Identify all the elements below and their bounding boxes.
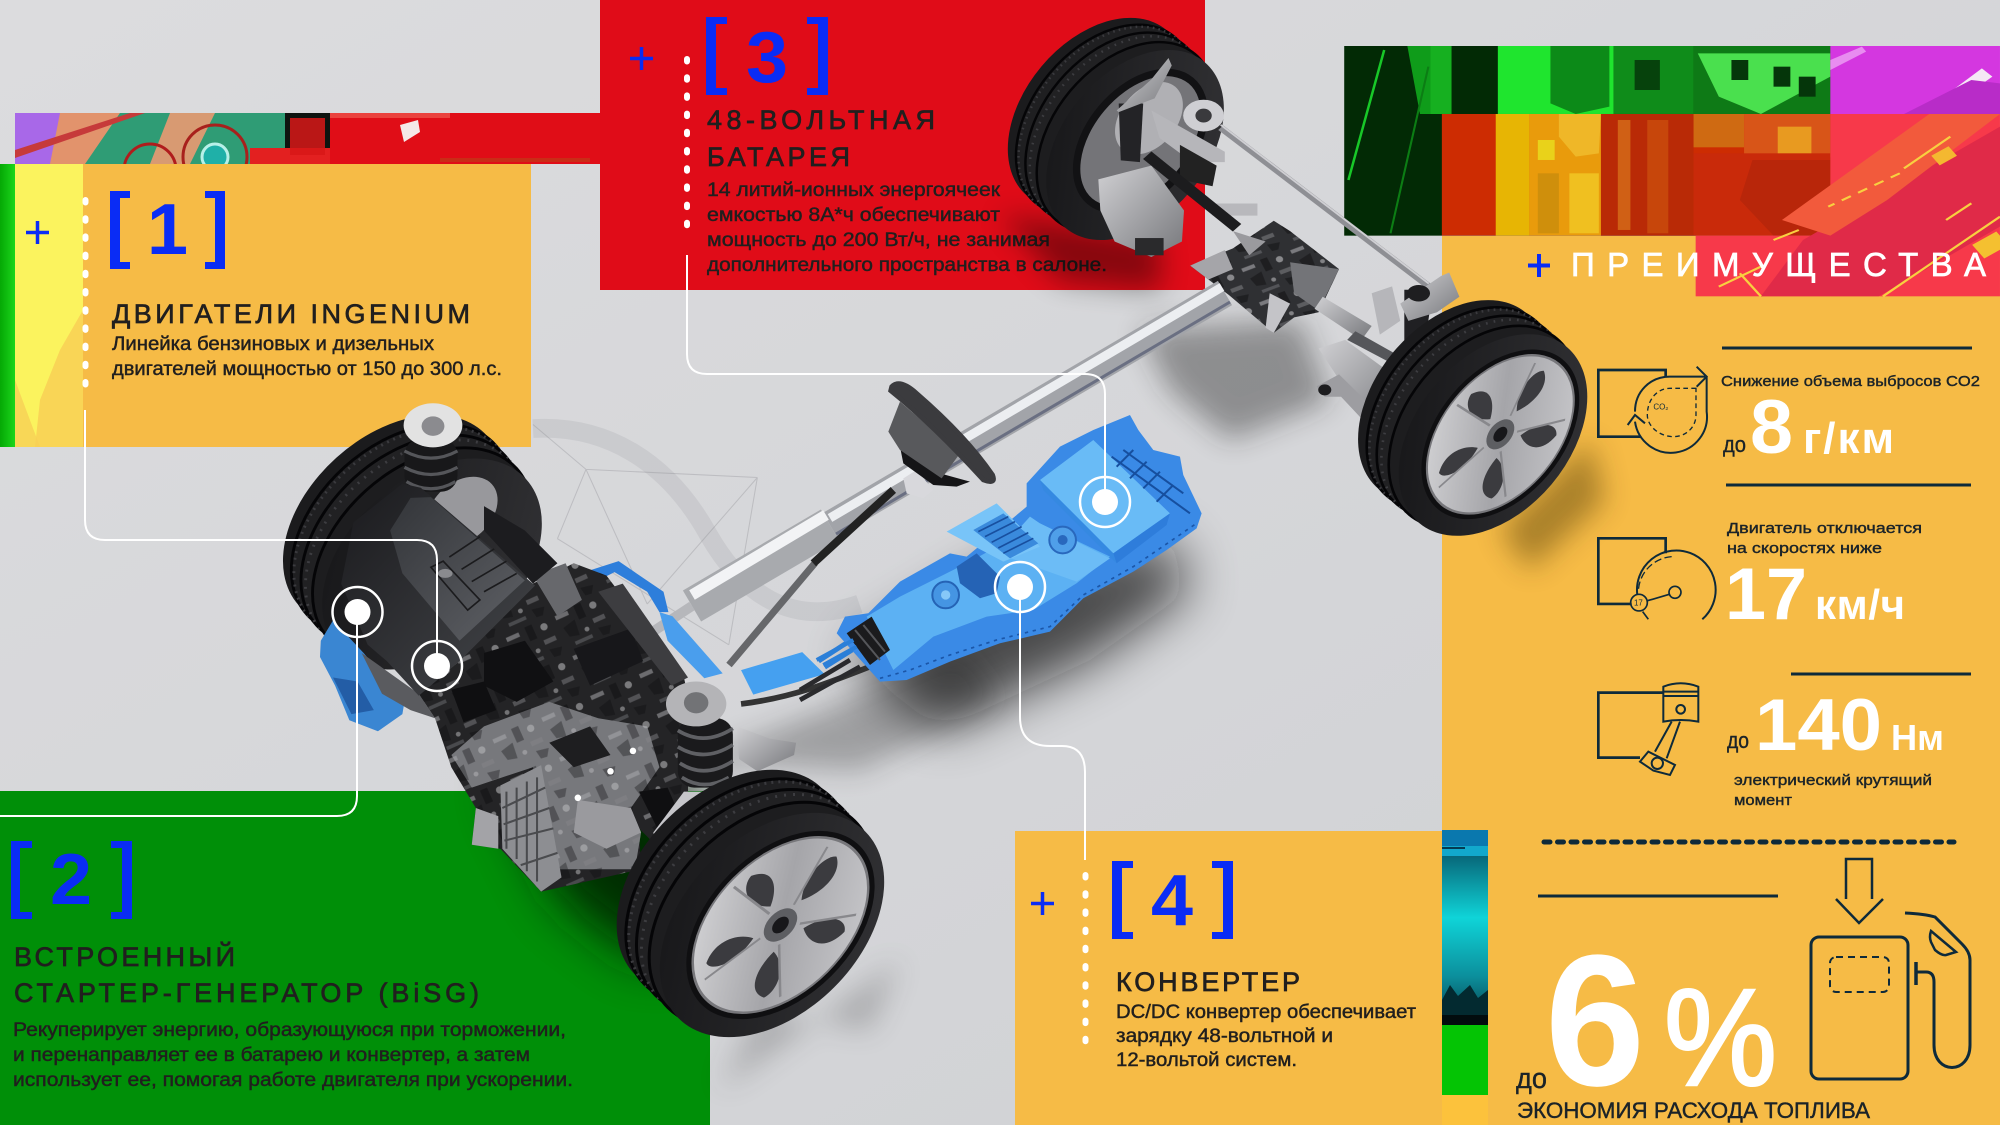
- transmission: [451, 702, 659, 869]
- stat: electric torque: до: [1727, 728, 1749, 753]
- text 3: дополнительного пространства в салоне.: [707, 255, 1107, 276]
- chassis: battery and converter: [800, 415, 1202, 700]
- chassis: steering wheel: [813, 384, 994, 563]
- icon: fuel pump with arrow: [1811, 859, 1970, 1079]
- marker: engine: [412, 641, 462, 691]
- chassis: high-voltage blue parts and front motor: [320, 561, 884, 731]
- stat: electric torque: Нм: [1891, 717, 1944, 758]
- text 2: [13, 1020, 573, 1091]
- stat: fuel economy: до: [1516, 1063, 1547, 1095]
- heading 3: 48-ВОЛЬТНАЯ: [707, 105, 935, 135]
- icon: CO2 cycle: CO₂: [1653, 402, 1668, 411]
- chassis: front far wheel: [242, 373, 583, 712]
- shadows under the chassis: [500, 215, 1605, 1090]
- stat: fuel economy: 6: [1545, 916, 1645, 1125]
- chassis: engine and transmission: [341, 403, 796, 892]
- heading 2: [14, 941, 479, 1008]
- stat: fuel economy: ЭКОНОМИЯ РАСХОДА ТОПЛИВА: [1517, 1098, 1870, 1123]
- chassis: rear suspension and differential: [1098, 58, 1459, 438]
- dotted divider 4: [1082, 875, 1088, 1056]
- stat: fuel economy: %: [1664, 961, 1777, 1115]
- panel 4: converter: [1015, 831, 1442, 1125]
- dotted divider 1: [82, 200, 88, 398]
- text 4: зарядку 48-вольтной и: [1116, 1026, 1333, 1047]
- icon: speedometer: [1598, 538, 1716, 619]
- number 3: [706, 17, 828, 98]
- marker: starter-generator: [332, 587, 382, 637]
- background wave pattern: [533, 424, 859, 645]
- stat: electric torque: электрический крутящий: [1734, 772, 1932, 789]
- number 1: [110, 190, 225, 270]
- text 2: использует ее, помогая работе двигателя при ускорении.: [13, 1070, 573, 1091]
- dotted divider 3: [684, 59, 690, 240]
- marker: converter: [995, 562, 1045, 612]
- number 3: 3: [746, 18, 788, 98]
- plus icon advantages: [1528, 254, 1550, 277]
- heading 2: СТАРТЕР-ГЕНЕРАТОР (BiSG): [14, 978, 479, 1008]
- stat: fuel economy: [1516, 842, 1970, 1125]
- number 2: 2: [50, 840, 92, 920]
- far strut: [404, 403, 462, 492]
- chassis: rear far wheel: [972, 0, 1260, 274]
- text 3: емкостью 8А*ч обеспечивают: [707, 205, 1000, 226]
- heading 2: ВСТРОЕННЫЙ: [14, 941, 235, 972]
- stat: CO2 reduction: Снижение объема выбросов CO2: [1721, 373, 1980, 390]
- marker: battery: [1080, 477, 1130, 527]
- oil pan: [500, 765, 562, 892]
- text 1: двигателей мощностью от 150 до 300 л.с.: [112, 359, 502, 380]
- stat: CO2 reduction: [1598, 346, 1980, 470]
- number 4: 4: [1151, 861, 1193, 941]
- number 4: [1112, 861, 1233, 941]
- stat: engine shutoff speed: Двигатель отключается: [1727, 520, 1922, 537]
- stat: CO2 reduction: до: [1723, 432, 1746, 457]
- text 3: 14 литий-ионных энергоячеек: [707, 180, 1001, 201]
- icon: speedometer: 17: [1634, 599, 1643, 608]
- stat: engine shutoff speed: 17: [1725, 554, 1807, 635]
- number 1: 1: [147, 190, 188, 270]
- stat: CO2 reduction: г/км: [1803, 414, 1894, 463]
- stat: electric torque: момент: [1734, 792, 1792, 809]
- text 1: Линейка бензиновых и дизельных: [112, 334, 435, 355]
- text 2: Рекуперирует энергию, образующуюся при торможении,: [13, 1020, 566, 1041]
- text 2: и перенаправляет ее в батарею и конвертер, а затем: [13, 1045, 530, 1066]
- text 4: DC/DC конвертер обеспечивает: [1116, 1002, 1416, 1023]
- chassis: rear near wheel: [1320, 264, 1625, 572]
- plus icon 1: [26, 221, 49, 244]
- heading: advantages: ПРЕИМУЩЕСТВА: [1571, 246, 1986, 283]
- red road image: [1830, 114, 2000, 296]
- heading 3: БАТАРЕЯ: [707, 142, 850, 172]
- panel 3: battery: [600, 0, 1205, 290]
- text 3: мощность до 200 Вт/ч, не занимая: [707, 230, 1050, 251]
- stat: electric torque: 140: [1755, 685, 1882, 766]
- panel 2: starter-generator: [0, 791, 710, 1125]
- number 2: [11, 840, 132, 920]
- engine cover: [341, 484, 535, 696]
- chassis: propeller shaft: [640, 287, 1230, 665]
- heading 4: КОНВЕРТЕР: [1116, 967, 1300, 997]
- connector line 3: [687, 255, 1105, 502]
- plus icon 4: [1031, 892, 1054, 915]
- text 4: 12-вольтой систем.: [1116, 1050, 1297, 1071]
- image strip: concert: [1442, 830, 1488, 1125]
- heading 3: [707, 105, 935, 172]
- dark blocks: [484, 641, 553, 702]
- heading 1: ДВИГАТЕЛИ INGENIUM: [112, 299, 470, 329]
- stat: engine shutoff speed: на скоростях ниже: [1727, 540, 1882, 557]
- connector line 4: [1020, 587, 1085, 860]
- icon: piston: [1598, 683, 1698, 775]
- text 1: [112, 334, 502, 380]
- magenta image: [1830, 46, 2000, 114]
- image collage: city buildings: [1344, 46, 2000, 296]
- connector line 1: [85, 410, 437, 666]
- chassis: front near wheel: [573, 726, 928, 1081]
- stat: electric torque: [1598, 672, 1971, 809]
- panel 1: engines: [26, 164, 531, 447]
- left colour strip: [0, 164, 83, 447]
- stat: engine shutoff speed: км/ч: [1815, 581, 1905, 628]
- near strut: [653, 682, 796, 845]
- plus icon 3: [630, 47, 653, 70]
- connector line 2: [0, 612, 357, 816]
- stat: CO2 reduction: 8: [1750, 385, 1793, 470]
- text 4: [1116, 1002, 1416, 1071]
- stat: engine shutoff speed: [1598, 484, 1971, 635]
- image strip: graffiti and red wall: [15, 113, 600, 196]
- icon: CO2 cycle: [1598, 367, 1707, 453]
- panel: advantages background: [1442, 236, 2000, 1125]
- text 3: [707, 180, 1107, 276]
